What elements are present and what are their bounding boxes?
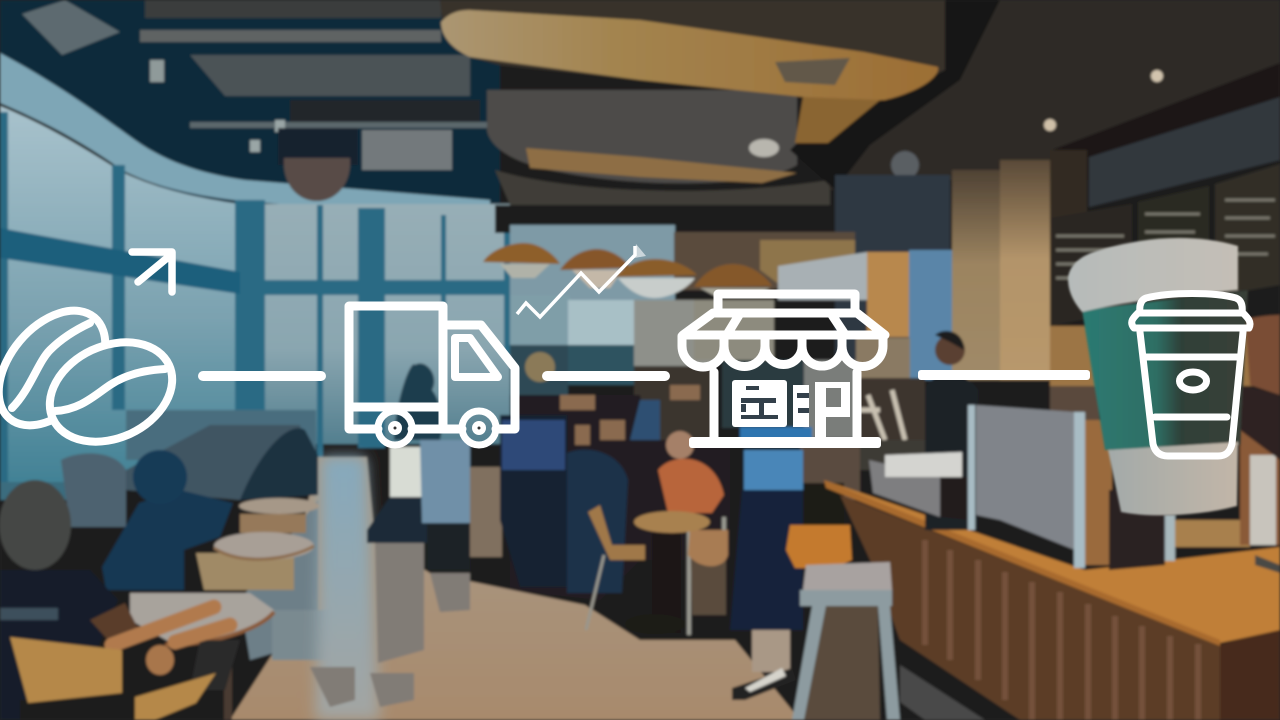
pendant lamps (483, 243, 772, 298)
cup body (1140, 332, 1243, 456)
connector line two (542, 371, 670, 381)
window panes, left (0, 106, 240, 490)
truck cargo box and frame (349, 306, 515, 429)
barista (925, 331, 978, 530)
truck cab window (455, 338, 498, 377)
truck front wheel (462, 411, 496, 445)
rising trend line (517, 244, 646, 317)
ceiling, left side (0, 0, 500, 240)
hand holding cup (1245, 315, 1280, 395)
blue and navy dressed patron (730, 450, 803, 700)
crowd colour flecks (560, 385, 700, 445)
icon: coffee cup (1132, 294, 1250, 456)
icon: storefront (682, 294, 885, 448)
counter (840, 495, 1220, 720)
ceiling, right side (800, 0, 1280, 190)
store interior colours (722, 360, 804, 428)
connector line one (198, 371, 326, 381)
standing patrons (367, 415, 628, 593)
patron arm (112, 607, 230, 645)
front chair (10, 637, 216, 720)
brown book (90, 603, 139, 640)
hanging second disc (487, 90, 797, 183)
truck rear wheel (378, 411, 412, 445)
front bean outline (34, 323, 188, 461)
floor reflections (310, 540, 470, 707)
floor (230, 457, 800, 720)
central chair and table (586, 505, 728, 635)
big cup sleeve (1108, 442, 1238, 515)
shop area behind window (510, 295, 570, 345)
store roof and awning (682, 294, 885, 441)
blue patron, left (102, 450, 233, 590)
orange shirt patron (634, 431, 724, 533)
icon: delivery truck (349, 306, 515, 445)
ceiling box and sphere (362, 130, 452, 170)
wall behind lamps (510, 225, 675, 305)
blue ceiling panel (1089, 97, 1280, 207)
curly haired patron (0, 480, 118, 720)
hanging large disc (440, 0, 945, 100)
window mullions (0, 112, 510, 482)
figure seen through window (394, 363, 442, 440)
window lower band (126, 410, 316, 460)
icon: coffee beans (0, 306, 176, 446)
back patrons, left (61, 453, 126, 527)
metal stool (792, 562, 900, 720)
store sign (732, 380, 850, 437)
cup logo oval (1180, 372, 1206, 390)
store base (689, 437, 881, 448)
tables and chairs, left (240, 514, 306, 533)
orange handbag (786, 483, 852, 568)
connector line three (918, 370, 1090, 380)
cup bands (1144, 357, 1238, 417)
arrow pointing up right (132, 252, 172, 292)
right wall panels (835, 175, 950, 375)
cup lid (1140, 294, 1242, 313)
counter equipment (869, 405, 1280, 573)
left bean outline and crease (0, 306, 110, 430)
light reflection column (315, 457, 380, 720)
photo of large takeaway cup (1068, 238, 1248, 515)
curved wall band (0, 53, 490, 222)
mid room dark zone (510, 395, 730, 600)
lower second disc (495, 170, 830, 231)
menu boards (1050, 204, 1132, 326)
front bean crease (55, 369, 165, 411)
big cup lid (1068, 238, 1238, 312)
